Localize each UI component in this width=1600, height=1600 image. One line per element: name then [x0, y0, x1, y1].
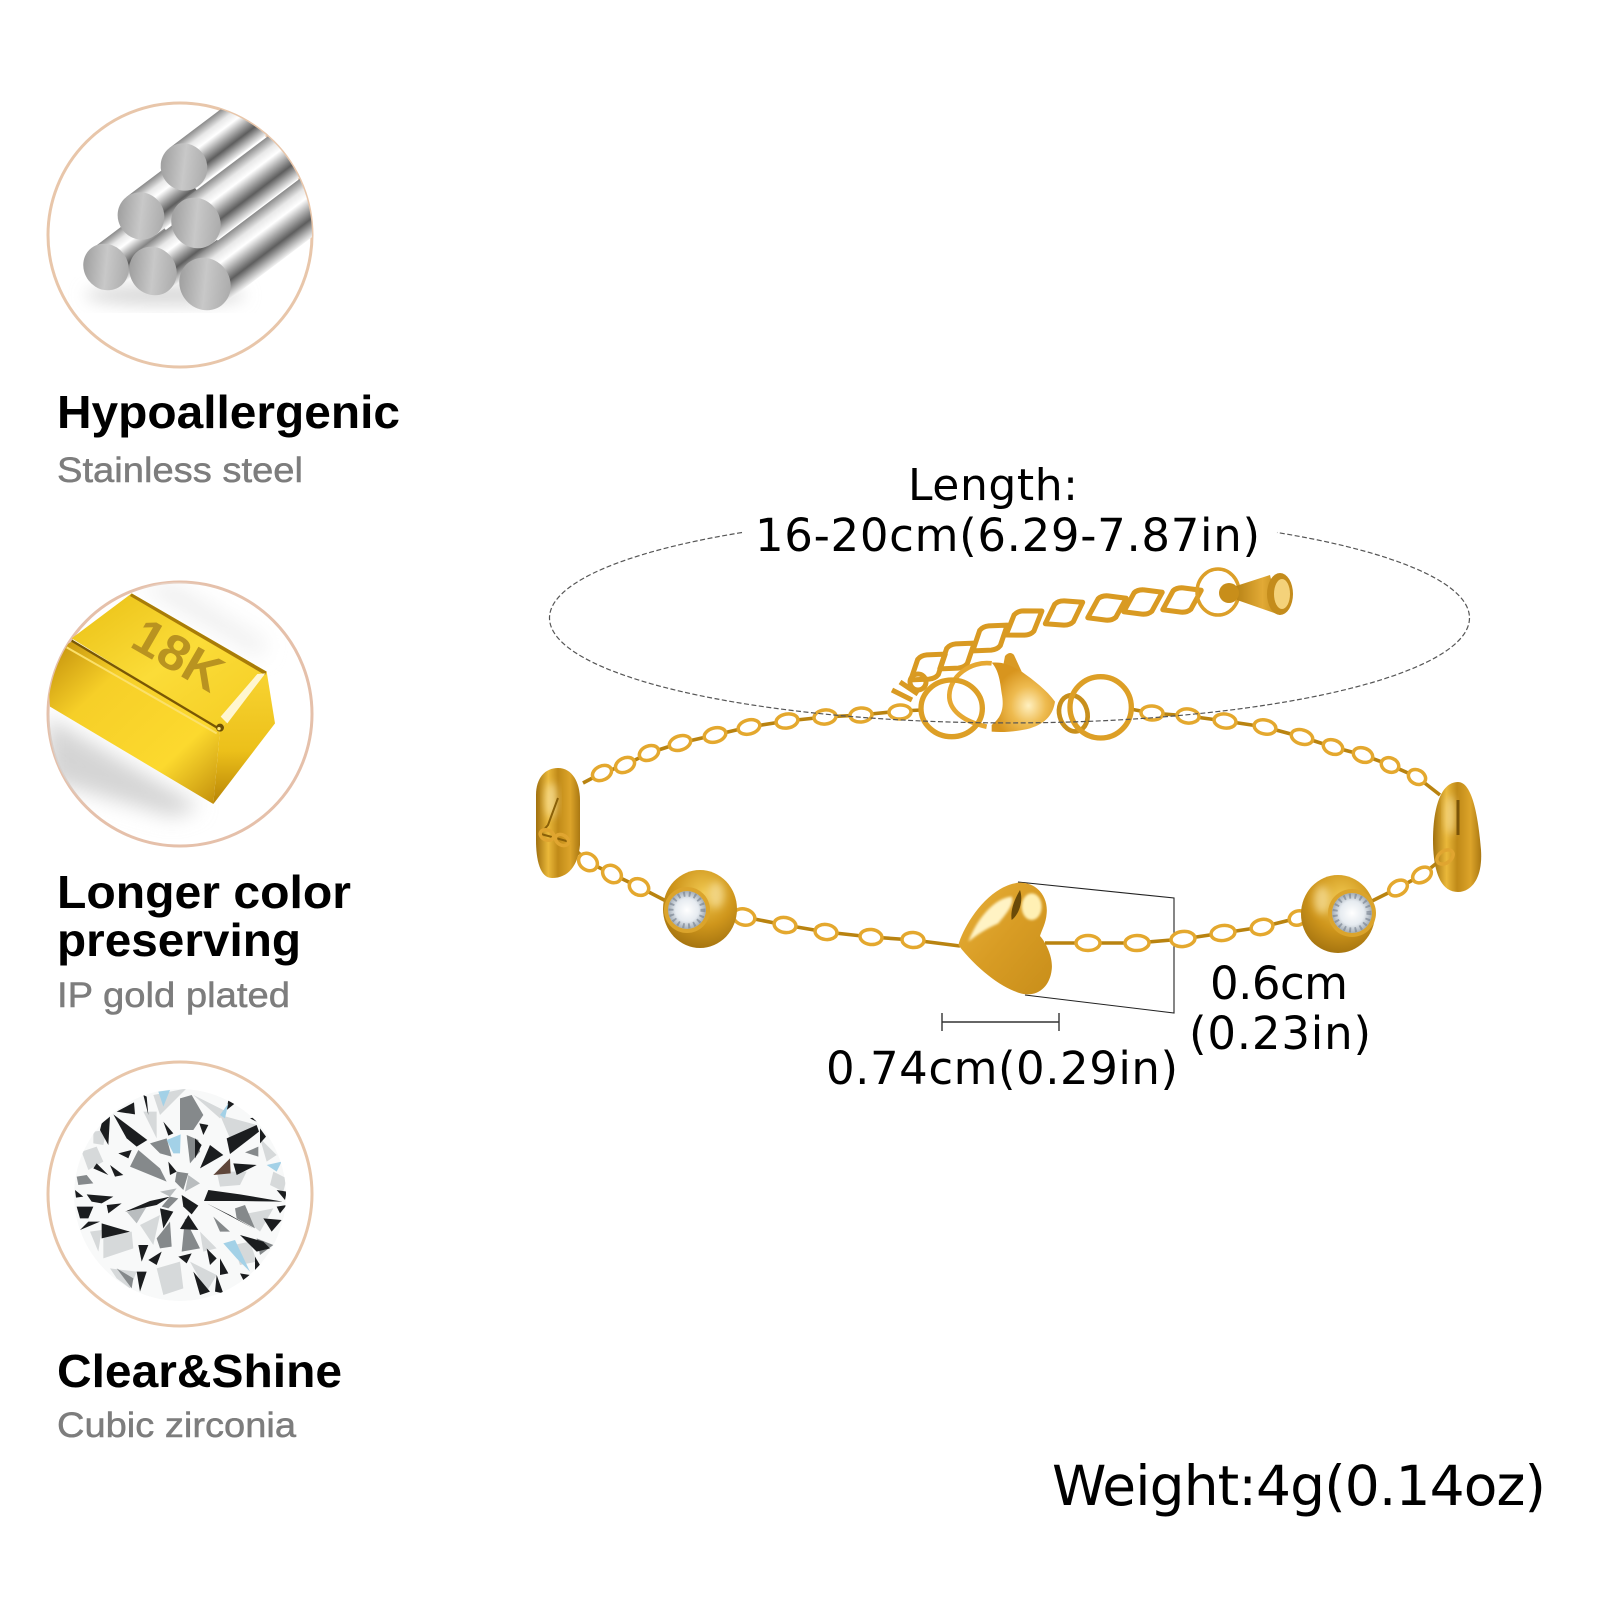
panel: hypoallergenic material	[46, 102, 399, 482]
icon: heart charm	[958, 883, 1052, 994]
text: IP gold plated: IP gold plated	[57, 976, 290, 1015]
heart width dimension bar	[942, 1013, 1059, 1031]
heading: longer color preserving: Longer color	[57, 866, 351, 918]
height label: 0.6cm	[1210, 957, 1348, 1010]
length label: 16-20cm(6.29-7.87in)	[755, 509, 1260, 562]
heading: longer color preserving	[57, 866, 351, 966]
icon: right bean charm	[1433, 782, 1481, 892]
icon: steel rods in circle	[46, 102, 314, 368]
heading: longer color preserving: preserving	[57, 914, 301, 966]
weight label: Weight:4g(0.14oz)	[1052, 1454, 1546, 1518]
text: cubic zirconia: Cubic zirconia	[57, 1406, 297, 1445]
text: stainless steel: Stainless steel	[57, 451, 303, 490]
icon: left stud with stone	[663, 870, 737, 948]
length label: Length:	[908, 460, 1078, 511]
icon: right stud with stone	[1301, 875, 1376, 953]
panel: longer color preserving	[47, 582, 351, 1015]
heading: clear and shine: Clear&Shine	[57, 1345, 342, 1397]
icon: 18K gold bar in circle	[47, 582, 312, 846]
icon: cubic zirconia diamond in circle	[48, 1062, 312, 1326]
chain links	[539, 704, 1456, 951]
extender chain	[892, 586, 1203, 700]
dashed length ellipse	[549, 532, 1470, 723]
panel: clear and shine	[48, 1062, 342, 1445]
lobster clasp and jump rings	[921, 653, 1131, 738]
heading: hypoallergenic: Hypoallergenic	[57, 386, 400, 438]
heart height dimension lines	[1018, 882, 1174, 1013]
width label: 0.74cm(0.29in)	[826, 1042, 1178, 1095]
length label	[755, 460, 1260, 562]
height label: (0.23in)	[1189, 1007, 1371, 1060]
icon: left bean charm	[536, 768, 580, 878]
extender ring and tail drop	[1197, 569, 1293, 615]
height label	[1189, 957, 1371, 1060]
chain: base line	[565, 709, 1443, 946]
bracelet	[536, 569, 1481, 994]
icon: 18K gold bar in circle: 18K	[123, 607, 233, 703]
